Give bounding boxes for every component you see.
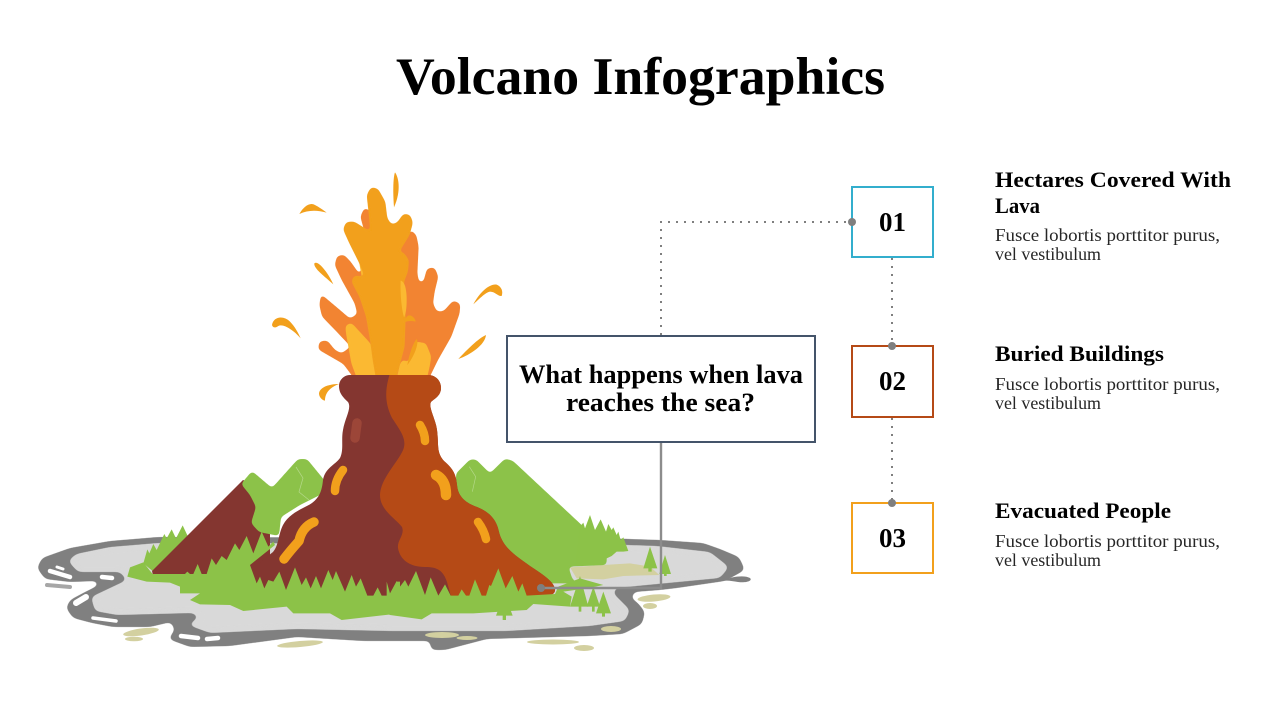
number box 03 bbox=[852, 499, 933, 573]
volcano body bbox=[254, 375, 555, 596]
item 1 text: Hectares Covered With bbox=[995, 167, 1231, 192]
foreground forest right bbox=[387, 568, 611, 620]
item 1 text bbox=[995, 167, 1231, 264]
item 1 text: vel vestibulum bbox=[995, 244, 1101, 264]
number box 03: 03 bbox=[879, 523, 906, 553]
number box 01: 01 bbox=[879, 207, 906, 237]
main flame bbox=[343, 187, 413, 387]
lava stream bbox=[380, 375, 555, 596]
item 3 text bbox=[995, 498, 1220, 570]
item 2 text: vel vestibulum bbox=[995, 393, 1101, 413]
left green mountain bbox=[241, 459, 325, 536]
item 3 text: vel vestibulum bbox=[995, 550, 1101, 570]
number box 01 bbox=[848, 187, 933, 257]
question box: What happens when lava bbox=[519, 359, 803, 389]
connector: dotted lines to the numbered boxes bbox=[661, 222, 892, 503]
sand patches bbox=[123, 563, 671, 651]
question box: reaches the sea? bbox=[566, 387, 755, 417]
right green mountain and trees bbox=[456, 459, 671, 583]
light flame tongues bbox=[345, 263, 431, 387]
number box 02: 02 bbox=[879, 366, 906, 396]
number box 02 bbox=[852, 342, 933, 417]
left brown slope bbox=[152, 480, 270, 575]
item 3 text: Evacuated People bbox=[995, 498, 1171, 523]
foreground forest left bbox=[127, 532, 400, 620]
item 2 text: Buried Buildings bbox=[995, 341, 1164, 366]
droplet by the rim bbox=[319, 384, 339, 401]
flames bbox=[272, 172, 502, 387]
left forest behind mountain bbox=[143, 525, 197, 572]
item 1 text: Lava bbox=[995, 193, 1040, 218]
item 2 text bbox=[995, 341, 1220, 413]
back flame bbox=[318, 208, 460, 387]
connector: solid line from question box to lava bbox=[537, 442, 661, 592]
lava droplets bbox=[272, 172, 502, 359]
lake with grey shore bbox=[37, 537, 751, 650]
title: Volcano Infographics bbox=[396, 48, 885, 106]
item 1 text: Fusce lobortis porttitor purus, bbox=[995, 225, 1220, 245]
lava spots bbox=[284, 425, 486, 559]
illustration: volcano on island bbox=[37, 172, 751, 651]
item 3 text: Fusce lobortis porttitor purus, bbox=[995, 531, 1220, 551]
question box bbox=[507, 336, 815, 442]
item 2 text: Fusce lobortis porttitor purus, bbox=[995, 374, 1220, 394]
